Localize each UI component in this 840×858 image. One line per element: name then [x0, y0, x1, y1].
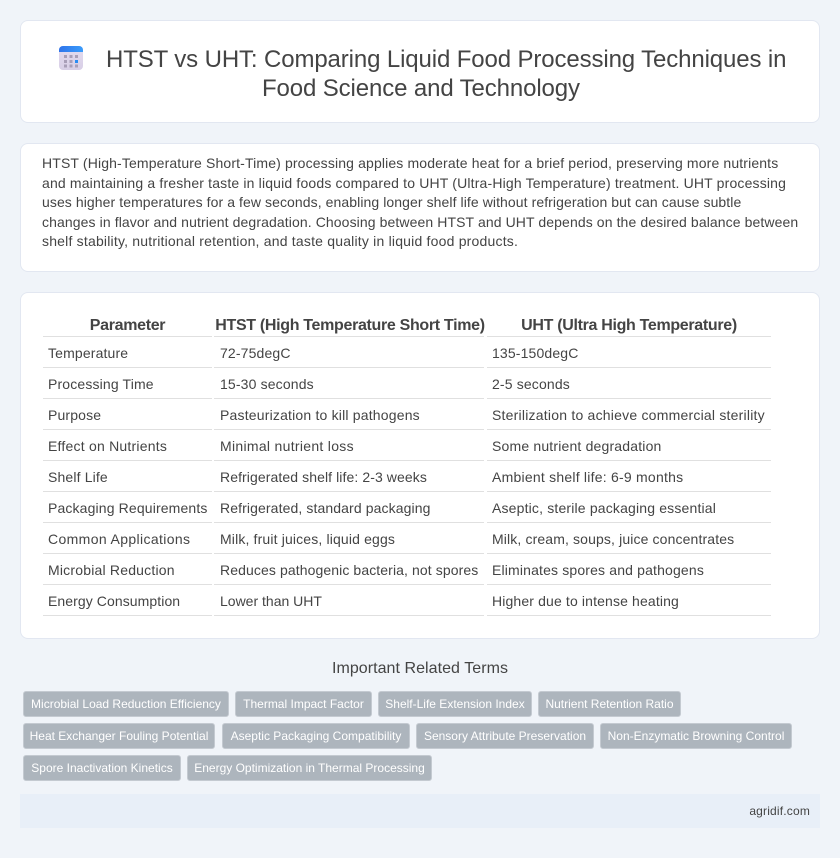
related term tags: Aseptic Packaging Compatibility [231, 729, 401, 743]
icon: calendar [59, 46, 83, 70]
row: common applications: Common Applications [48, 531, 190, 547]
related term tags [23, 691, 792, 781]
row: effect on nutrients: Some nutrient degradation [492, 438, 662, 454]
row: purpose: Pasteurization to kill pathogens [220, 407, 420, 423]
row: energy consumption: Higher due to intense heating [492, 593, 679, 609]
row: microbial reduction: Microbial Reduction [48, 562, 175, 578]
description text: changes in flavor and nutrient degradation. Choosing between HTST and UHT depends on the desired balance between [42, 214, 798, 230]
table header: UHT (Ultra High Temperature) [521, 317, 737, 334]
row: shelf life: Ambient shelf life: 6-9 months [492, 469, 683, 485]
row: packaging requirements: Packaging Requirements [48, 500, 208, 516]
related term tags: Sensory Attribute Preservation [424, 729, 586, 743]
row: microbial reduction: Reduces pathogenic bacteria, not spores [220, 562, 478, 578]
row: processing time: 2-5 seconds [492, 376, 570, 392]
panel: description [20, 143, 820, 272]
row: packaging requirements: Refrigerated, standard packaging [220, 500, 431, 516]
row: processing time: Processing Time [48, 376, 154, 392]
description text: HTST (High-Temperature Short-Time) processing applies moderate heat for a brief period, preserving more nutrients [42, 155, 778, 171]
row: microbial reduction [48, 562, 704, 578]
title: Food Science and Technology [262, 75, 580, 102]
description text: uses higher temperatures for a few seconds, enabling longer shelf life without refrigeration but can cause subtle [42, 194, 741, 210]
title: HTST vs UHT: Comparing Liquid Food Processing Techniques in [106, 46, 786, 73]
related term tags: Spore Inactivation Kinetics [31, 761, 173, 775]
title [106, 46, 786, 102]
row: purpose: Purpose [48, 407, 101, 423]
panel: comparison table [20, 292, 820, 639]
related term tags: Thermal Impact Factor [243, 697, 364, 711]
related term tags: Energy Optimization in Thermal Processing [194, 761, 425, 775]
row: processing time [48, 376, 570, 392]
row: purpose: Sterilization to achieve commercial sterility [492, 407, 765, 423]
row: temperature: Temperature [48, 345, 128, 361]
row: effect on nutrients: Effect on Nutrients [48, 438, 167, 454]
row: common applications [48, 531, 734, 547]
row: effect on nutrients: Minimal nutrient loss [220, 438, 354, 454]
table header: Parameter [90, 317, 165, 334]
row: purpose [48, 407, 765, 423]
header card [20, 20, 820, 123]
related terms heading: Important Related Terms [332, 660, 508, 677]
row: temperature: 72-75degC [220, 345, 291, 361]
description text [42, 155, 798, 249]
row: energy consumption: Energy Consumption [48, 593, 180, 609]
row: shelf life: Refrigerated shelf life: 2-3 weeks [220, 469, 427, 485]
row: packaging requirements: Aseptic, sterile packaging essential [492, 500, 716, 516]
description text: and maintaining a fresher taste in liquid foods compared to UHT (Ultra-High Temperature) treatment. UHT processing [42, 175, 786, 191]
related term tags: Nutrient Retention Ratio [545, 697, 674, 711]
row: common applications: Milk, cream, soups, juice concentrates [492, 531, 734, 547]
row: microbial reduction: Eliminates spores and pathogens [492, 562, 704, 578]
row: shelf life: Shelf Life [48, 469, 108, 485]
row: packaging requirements [48, 500, 716, 516]
row: energy consumption: Lower than UHT [220, 593, 322, 609]
description text: shelf stability, nutritional retention, and taste quality in liquid food products. [42, 233, 518, 249]
row: common applications: Milk, fruit juices, liquid eggs [220, 531, 395, 547]
row: energy consumption [48, 593, 679, 609]
footer source: agridif.com [749, 804, 810, 818]
row: effect on nutrients [48, 438, 662, 454]
table header [90, 317, 737, 334]
table header: HTST (High Temperature Short Time) [215, 317, 485, 334]
row: temperature: 135-150degC [492, 345, 578, 361]
row: shelf life [48, 469, 683, 485]
footer bar [20, 794, 820, 828]
related term tags: Heat Exchanger Fouling Potential [30, 729, 208, 743]
related term tags: Shelf-Life Extension Index [385, 697, 525, 711]
row: temperature [48, 345, 578, 361]
related term tags: Non-Enzymatic Browning Control [608, 729, 784, 743]
related term tags: Microbial Load Reduction Efficiency [31, 697, 221, 711]
row: processing time: 15-30 seconds [220, 376, 314, 392]
